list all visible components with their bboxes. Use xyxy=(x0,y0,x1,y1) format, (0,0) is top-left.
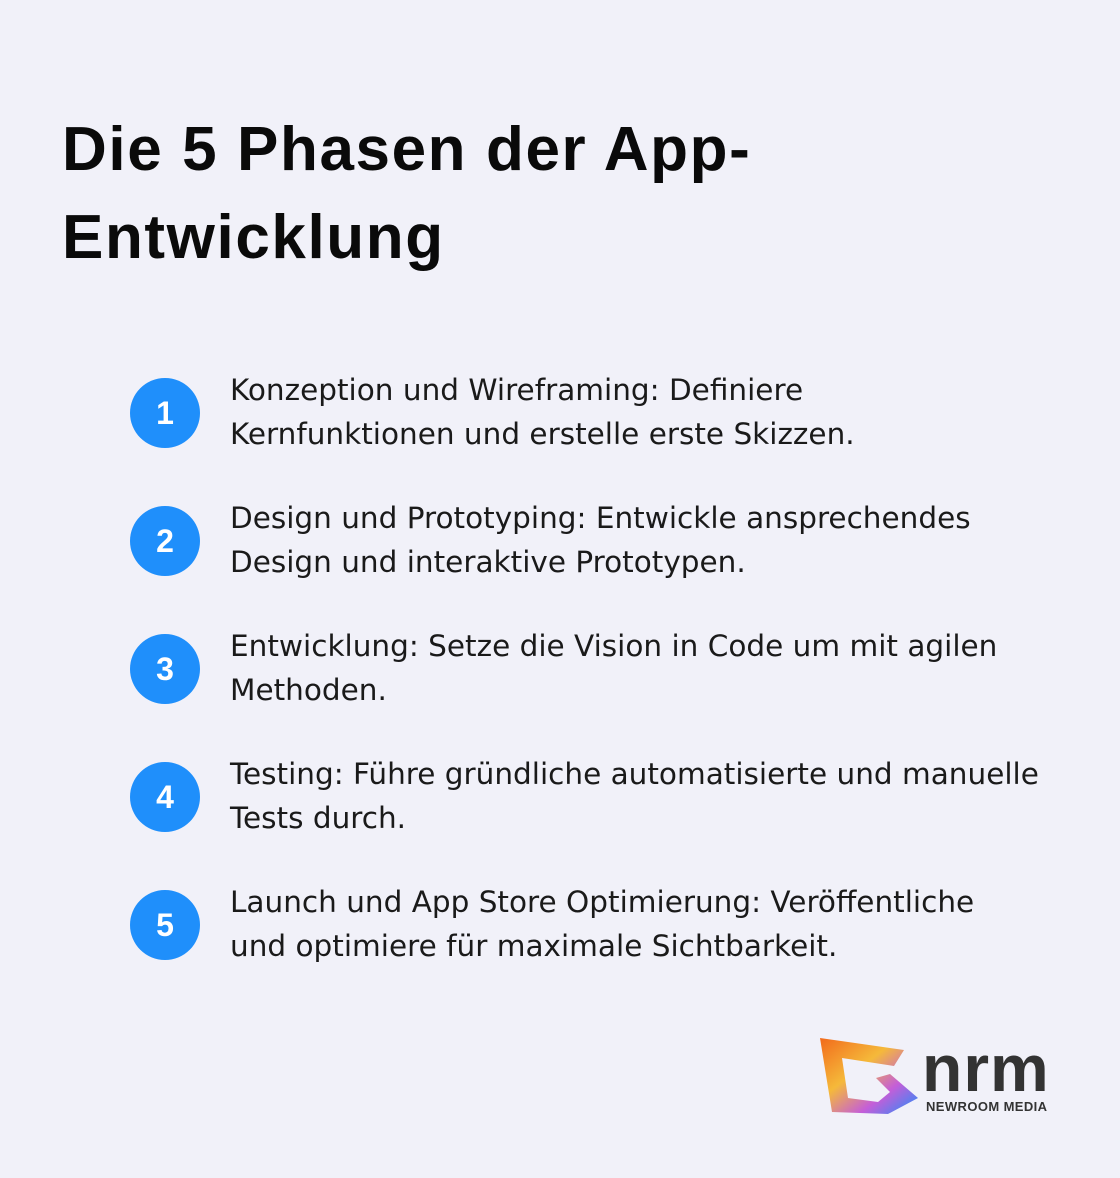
step 1 xyxy=(130,373,855,451)
logo xyxy=(820,1036,1050,1114)
step 5: und optimiere für maximale Sichtbarkeit. xyxy=(230,929,837,963)
step 2: Design und interaktive Prototypen. xyxy=(230,545,746,579)
title xyxy=(62,115,751,272)
step 5: Launch und App Store Optimierung: Veröffentliche xyxy=(230,885,974,919)
step 2: Design und Prototyping: Entwickle ansprechendes xyxy=(230,501,971,535)
step 1: Kernfunktionen und erstelle erste Skizzen. xyxy=(230,417,855,451)
step 1: Konzeption und Wireframing: Definiere xyxy=(230,373,803,407)
step 4 xyxy=(130,757,1039,835)
step 4: 4 xyxy=(156,779,174,815)
step 1: 1 xyxy=(156,395,174,431)
step 3: Entwicklung: Setze die Vision in Code um mit agilen xyxy=(230,629,997,663)
title: Entwicklung xyxy=(62,203,445,272)
step 3: 3 xyxy=(156,651,174,687)
step 2 xyxy=(130,501,971,579)
step 4: Tests durch. xyxy=(230,801,406,835)
step 2: 2 xyxy=(156,523,174,559)
step 5: 5 xyxy=(156,907,174,943)
step 3: Methoden. xyxy=(230,673,387,707)
step 4: Testing: Führe gründliche automatisierte und manuelle xyxy=(230,757,1039,791)
title: Die 5 Phasen der App- xyxy=(62,115,751,184)
step 5 xyxy=(130,885,974,963)
step 3 xyxy=(130,629,997,707)
logo: NEWROOM MEDIA xyxy=(926,1099,1048,1114)
